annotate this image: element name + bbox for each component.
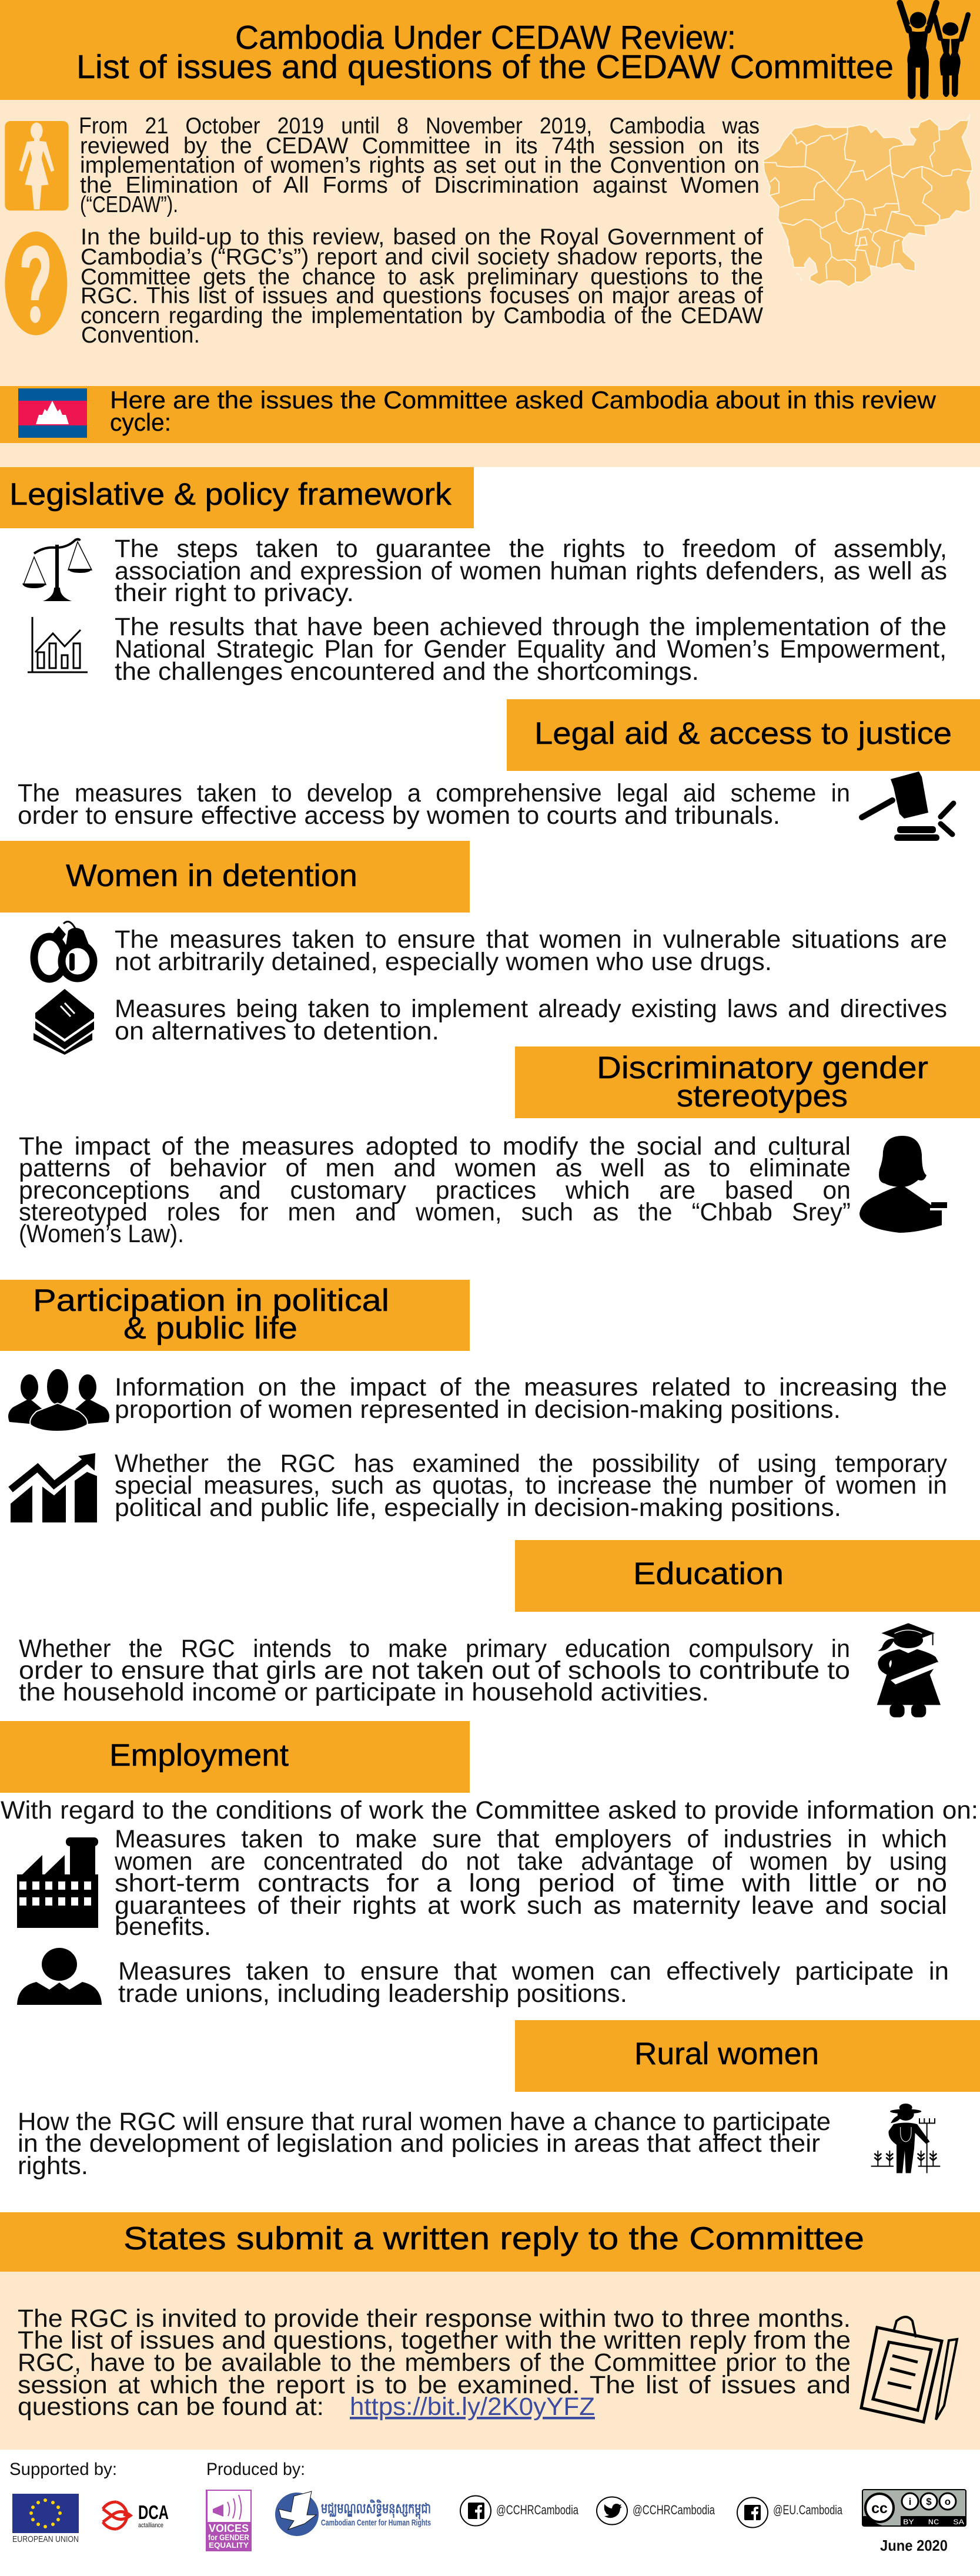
heading: legislative and policy framework xyxy=(0,467,474,528)
icon: rising bar chart with arrow xyxy=(11,1453,97,1522)
social: CCHR Facebook: @CCHRCambodia xyxy=(496,2503,579,2517)
text: review dates: (“CEDAW”). xyxy=(80,192,178,217)
text: build-up to review xyxy=(81,224,763,348)
text: written reply details xyxy=(18,2305,851,2421)
text: review dates: the Elimination of All Forms of Discrimination against Women xyxy=(80,173,760,198)
text: temporary special measures xyxy=(115,1450,947,1522)
social: CCHR Twitter xyxy=(597,2497,715,2524)
icon: two women with raised arms xyxy=(900,3,968,99)
text: trade unions xyxy=(118,1957,949,2008)
panel: written reply xyxy=(0,2212,980,2450)
text: social and cultural patterns: The impact of the measures adopted to modify the social and cultural xyxy=(19,1132,851,1160)
text: legal aid scheme: order to ensure effective access by women to courts and tribunals. xyxy=(18,801,780,830)
icon: line and bar chart xyxy=(28,617,88,673)
text: build-up to review: In the build-up to this review, based on the Royal Government of xyxy=(81,224,763,250)
text: rural women participation: rights. xyxy=(18,2152,88,2180)
text: rural women participation: How the RGC will ensure that rural women have a chance to participate xyxy=(18,2108,831,2136)
heading: education: Education xyxy=(633,1557,784,1591)
heading: women in detention xyxy=(0,841,470,913)
heading: women in detention: Women in detention xyxy=(66,858,357,893)
heading: discriminatory gender stereotypes: stereotypes xyxy=(677,1079,848,1113)
logo: DCA xyxy=(103,2501,169,2529)
logo: Cambodian Center for Human Rights: មជ្ឈមណ្ឌលសិទ្ធិមនុស្សកម្ពុជា xyxy=(321,2499,431,2520)
text: review dates xyxy=(79,113,760,217)
link: https://bit.ly/2K0yYFZ xyxy=(350,2393,595,2421)
social: EU Facebook: @EU.Cambodia xyxy=(773,2503,843,2517)
logo: European Union xyxy=(12,2494,79,2544)
heading: issues intro: Here are the issues the Committee asked Cambodia about in this review xyxy=(110,386,936,414)
title xyxy=(76,19,894,86)
text: legal aid scheme xyxy=(18,779,850,830)
icon: woman symbol xyxy=(5,121,69,210)
heading: legal aid and access to justice: Legal aid & access to justice xyxy=(534,716,952,751)
icon: question mark xyxy=(5,232,67,336)
text: written reply details: session at which the report is to be examined. The list of issues and xyxy=(18,2371,851,2399)
heading: legislative and policy framework: Legislative & policy framework xyxy=(9,477,452,512)
panel: discriminatory gender stereotypes xyxy=(19,1046,980,1248)
panel: legal aid and access to justice xyxy=(18,699,980,841)
title: Cambodia Under CEDAW Review: xyxy=(235,19,736,56)
heading: issues intro: cycle: xyxy=(110,408,171,436)
text: compulsory primary education xyxy=(19,1635,850,1706)
text: alternatives to detention: Measures being taken to implement already existing laws and directives xyxy=(115,995,947,1023)
logo: European Union: EUROPEAN UNION xyxy=(12,2534,79,2544)
panel: women in detention xyxy=(0,841,947,1055)
icon: scales of justice xyxy=(22,539,92,601)
text: alternatives to detention xyxy=(115,995,947,1045)
heading: discriminatory gender stereotypes: Discriminatory gender xyxy=(597,1051,928,1085)
logo: Creative Commons licence xyxy=(862,2490,966,2527)
logo: Voices for Gender Equality: VOICES xyxy=(209,2523,249,2534)
text: date: June 2020 xyxy=(880,2537,948,2554)
icon: gavel xyxy=(862,772,954,841)
heading: written reply xyxy=(0,2212,980,2272)
text: produced by: Produced by: xyxy=(206,2460,305,2479)
text: written reply details: The list of issues and questions, together with the written reply from the xyxy=(18,2326,851,2354)
text: social and cultural patterns: stereotyped roles for men and women, such as the “Chbab Srey” xyxy=(19,1198,851,1226)
text: decision-making positions: Information on the impact of the measures related to increasing the xyxy=(115,1373,947,1401)
icon: three people xyxy=(8,1368,109,1431)
logo: Voices for Gender Equality: for GENDER xyxy=(208,2533,249,2542)
text: compulsory primary education: the household income or participate in household activities. xyxy=(19,1678,709,1706)
text: written reply details: RGC, have to be available to the members of the Committee prior to the xyxy=(18,2349,851,2377)
text: rural women participation xyxy=(18,2108,831,2180)
text: build-up to review: concern regarding the implementation by Cambodia of the CEDAW xyxy=(81,303,763,328)
text: national strategic plan: National Strategic Plan for Gender Equality and Women’s Empowerment, xyxy=(115,635,946,663)
text: short-term contracts: benefits. xyxy=(115,1913,211,1941)
heading: written reply: States submit a written reply to the Committee xyxy=(123,2220,864,2256)
logo: Voices for Gender Equality xyxy=(206,2490,252,2551)
panel: legislative and policy framework xyxy=(0,467,947,686)
text: supported by: Supported by: xyxy=(9,2460,117,2479)
icon: handcuffs xyxy=(34,921,93,979)
text: rights of defenders: The steps taken to guarantee the rights to freedom of assembly, xyxy=(115,535,947,563)
text: build-up to review: Convention. xyxy=(81,323,200,348)
text: review dates: implementation of women’s rights as set out in the Convention on xyxy=(80,153,760,178)
heading: issues intro xyxy=(110,386,936,436)
text: short-term contracts xyxy=(114,1825,947,1941)
heading: rural women xyxy=(515,2020,980,2092)
heading: education xyxy=(515,1540,980,1612)
text: arbitrary detention: not arbitrarily detained, especially women who use drugs. xyxy=(115,948,772,976)
text: short-term contracts: short-term contracts for a long period of time with little or no xyxy=(115,1869,947,1897)
title: List of issues and questions of the CEDAW Committee xyxy=(76,48,894,86)
text: review dates: From 21 October 2019 until 8 November 2019, Cambodia was xyxy=(79,113,760,139)
text: conditions of work: With regard to the conditions of work the Committee asked to provide information on: xyxy=(1,1796,978,1824)
panel: participation in political and public life xyxy=(0,1280,947,1522)
heading: participation in political and public life: Participation in political xyxy=(33,1283,389,1318)
text: written reply details: The RGC is invited to provide their response within two to three months. xyxy=(18,2305,851,2333)
panel: footer xyxy=(9,2460,966,2554)
icon: graduate woman xyxy=(877,1623,941,1718)
heading: participation in political and public life: & public life xyxy=(123,1311,297,1346)
icon: woman bust xyxy=(859,1136,947,1233)
social: CCHR Facebook xyxy=(460,2496,579,2525)
logo: Voices for Gender Equality: EQUALITY xyxy=(209,2541,249,2550)
text: decision-making positions xyxy=(115,1373,947,1424)
text: legal aid scheme: The measures taken to develop a comprehensive legal aid scheme in xyxy=(18,779,850,807)
text: decision-making positions: proportion of women represented in decision-making positions. xyxy=(115,1396,841,1424)
panel: issues intro band xyxy=(0,386,980,443)
map of Cambodia xyxy=(763,115,972,287)
icon: factory xyxy=(17,1837,98,1928)
heading: discriminatory gender stereotypes xyxy=(515,1046,980,1118)
text: national strategic plan: the challenges encountered and the shortcomings. xyxy=(115,658,699,686)
logo: Creative Commons licence: o xyxy=(945,2496,951,2507)
icon: Cambodian flag xyxy=(18,388,87,438)
logo: Cambodian Center for Human Rights xyxy=(275,2491,431,2536)
text: short-term contracts: Measures taken to make sure that employers of industries in which xyxy=(115,1825,947,1853)
logo: Creative Commons licence: cc xyxy=(871,2500,888,2517)
text: national strategic plan xyxy=(115,613,946,686)
logo: DCA: DCA xyxy=(138,2501,169,2523)
text: trade unions: Measures taken to ensure that women can effectively participate in xyxy=(118,1957,949,1985)
text: compulsory primary education: order to ensure that girls are not taken out of schools to contribute to xyxy=(19,1656,850,1685)
text: arbitrary detention: The measures taken to ensure that women in vulnerable situations are xyxy=(115,925,947,954)
text: trade unions: trade unions, including leadership positions. xyxy=(118,1980,627,2008)
heading: rural women: Rural women xyxy=(634,2037,819,2071)
text: rights of defenders: their right to privacy. xyxy=(115,579,354,607)
text: build-up to review: Committee gets the chance to ask preliminary questions to the xyxy=(81,264,763,290)
social: CCHR Twitter: @CCHRCambodia xyxy=(633,2503,715,2517)
icon: clipboard and pencil xyxy=(861,2317,957,2422)
text: rights of defenders: association and expression of women human rights defenders, as well as xyxy=(115,557,947,585)
heading: legal aid and access to justice xyxy=(507,699,980,771)
text: rural women participation: in the development of legislation and policies in areas that affect their xyxy=(18,2129,820,2158)
text: build-up to review: Cambodia’s (“RGC’s”) report and civil society shadow reports, the xyxy=(81,244,763,270)
logo: Creative Commons licence: $ xyxy=(926,2496,932,2507)
text: short-term contracts: women are concentrated do not take advantage of women by using xyxy=(114,1847,947,1876)
social: EU Facebook xyxy=(737,2497,843,2528)
panel: employment xyxy=(0,1721,978,2008)
heading: participation in political and public life xyxy=(0,1280,470,1351)
heading: employment: Employment xyxy=(109,1738,289,1773)
text: written reply details: questions can be found at: xyxy=(18,2393,324,2421)
text: social and cultural patterns: (Women’s Law). xyxy=(19,1220,184,1248)
text: short-term contracts: guarantees of their rights at work such as maternity leave and social xyxy=(115,1891,947,1920)
text: rights of defenders xyxy=(115,535,947,607)
icon: stack of books xyxy=(34,989,94,1055)
text: temporary special measures: political and public life, especially in decision-making positions. xyxy=(115,1494,841,1522)
text: alternatives to detention: on alternatives to detention. xyxy=(115,1017,439,1045)
logo: DCA: actalliance xyxy=(138,2522,163,2529)
text: build-up to review: RGC. This list of issues and questions focuses on major areas of xyxy=(81,283,763,308)
text: compulsory primary education: Whether the RGC intends to make primary education compulsory in xyxy=(19,1635,850,1663)
icon: farmer woman xyxy=(871,2104,940,2173)
text: temporary special measures: special measures, such as quotas, to increase the number of women in xyxy=(115,1471,947,1500)
logo: Creative Commons licence: BY NC SA xyxy=(903,2518,964,2527)
panel: rural women xyxy=(18,2020,980,2180)
panel: introduction xyxy=(0,100,980,467)
text: social and cultural patterns: patterns of behavior of men and women as well as to eliminate xyxy=(19,1154,851,1182)
text: social and cultural patterns: preconceptions and customary practices which are based on xyxy=(19,1176,851,1205)
text: temporary special measures: Whether the RGC has examined the possibility of using temporary xyxy=(115,1450,947,1478)
text: social and cultural patterns xyxy=(19,1132,851,1248)
text: arbitrary detention xyxy=(115,925,947,976)
logo: Cambodian Center for Human Rights: Cambodian Center for Human Rights xyxy=(321,2518,431,2528)
panel: education xyxy=(19,1540,980,1718)
panel: page header xyxy=(0,0,980,100)
icon: person xyxy=(17,1948,102,2005)
text: national strategic plan: The results that have been achieved through the implementation of the xyxy=(115,613,946,641)
text: review dates: reviewed by the CEDAW Committee in its 74th session on its xyxy=(80,133,760,159)
logo: Creative Commons licence: i xyxy=(909,2496,911,2507)
heading: employment xyxy=(0,1721,470,1793)
